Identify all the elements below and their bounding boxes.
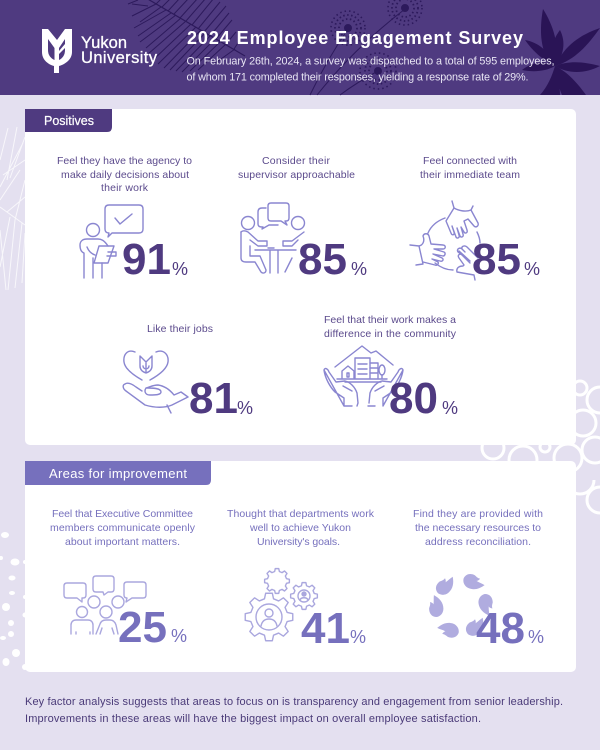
- label: University's goals.: [257, 536, 340, 548]
- stat: community 80%: [324, 314, 458, 423]
- heading tab: positives: [25, 109, 112, 132]
- label: supervisor approachable: [238, 169, 355, 181]
- intro text: of whom 171 completed their responses, yielding a response rate of 29%.: [186, 72, 528, 84]
- heading tab: positives: Positives: [44, 114, 94, 128]
- percent sign: %: [237, 398, 253, 418]
- heading tab: areas for improvement: [25, 461, 211, 485]
- label: members communicate openly: [50, 522, 196, 534]
- stat: supervisor 85%: [238, 155, 367, 284]
- logo: [42, 29, 158, 73]
- stat: team 85%: [410, 155, 540, 284]
- label: Find they are provided with: [413, 508, 543, 520]
- label: Feel connected with: [423, 155, 517, 167]
- label: Feel that their work makes a: [324, 314, 456, 326]
- panel: areas for improvement: [25, 461, 576, 672]
- label: their immediate team: [420, 169, 520, 181]
- stat: departments 41%: [227, 508, 375, 653]
- label: well to achieve Yukon: [249, 522, 351, 534]
- label: difference in the community: [324, 328, 457, 340]
- value: 91: [122, 235, 171, 284]
- logo mark: [42, 29, 72, 73]
- value: 81: [189, 374, 238, 423]
- stat: agency 91%: [57, 155, 192, 284]
- heading tab: areas for improvement: Areas for improvement: [49, 466, 187, 481]
- conclusion text: Improvements in these areas will have the biggest impact on overall employee satisfaction.: [25, 713, 481, 725]
- icon: hand with heart and leaf: [123, 351, 188, 413]
- icon: gears with person: [245, 569, 317, 641]
- value: 85: [472, 235, 521, 284]
- label: Feel that Executive Committee: [52, 508, 193, 520]
- header banner: [0, 0, 600, 95]
- label: make daily decisions about: [61, 169, 189, 181]
- percent sign: %: [524, 259, 540, 279]
- logo wordmark: University: [81, 49, 158, 67]
- percent sign: %: [350, 627, 366, 647]
- label: address reconciliation.: [425, 536, 531, 548]
- icon: circle of flames: [427, 572, 496, 639]
- label: the necessary resources to: [415, 522, 541, 534]
- value: 80: [389, 374, 438, 423]
- percent sign: %: [172, 259, 188, 279]
- panel: positives: [25, 109, 576, 445]
- value: 85: [298, 235, 347, 284]
- percent sign: %: [351, 259, 367, 279]
- value: 41: [301, 604, 350, 653]
- logo wordmark: Yukon: [81, 34, 127, 52]
- label: their work: [101, 182, 149, 194]
- intro text: On February 26th, 2024, a survey was dispatched to a total of 595 employees,: [186, 56, 554, 68]
- dark flower decoration: [522, 9, 600, 95]
- percent sign: %: [171, 626, 187, 646]
- label: about important matters.: [65, 536, 180, 548]
- label: Consider their: [262, 155, 330, 167]
- conclusion text: Key factor analysis suggests that areas to focus on is transparency and engagement from senior leadership.: [25, 696, 563, 708]
- icon: hands holding community: [324, 346, 403, 406]
- stat: reconciliation 48%: [413, 508, 544, 653]
- label: Feel they have the agency to: [57, 155, 192, 167]
- stat: executive committee 25%: [50, 508, 196, 652]
- label: Thought that departments work: [227, 508, 375, 520]
- dandelion decoration: [310, 0, 422, 95]
- icon: three joined hands: [410, 201, 480, 280]
- stat: jobs 81%: [123, 323, 253, 423]
- icon: person with speech bubble: [80, 205, 143, 278]
- icon: group with speech bubbles: [64, 576, 146, 634]
- icon: meeting at table: [241, 203, 304, 273]
- percent sign: %: [442, 398, 458, 418]
- fern decoration: [128, 0, 245, 72]
- value: 48: [476, 604, 525, 653]
- percent sign: %: [528, 627, 544, 647]
- title: 2024 Employee Engagement Survey: [187, 28, 523, 48]
- value: 25: [118, 603, 167, 652]
- label: Like their jobs: [147, 323, 213, 335]
